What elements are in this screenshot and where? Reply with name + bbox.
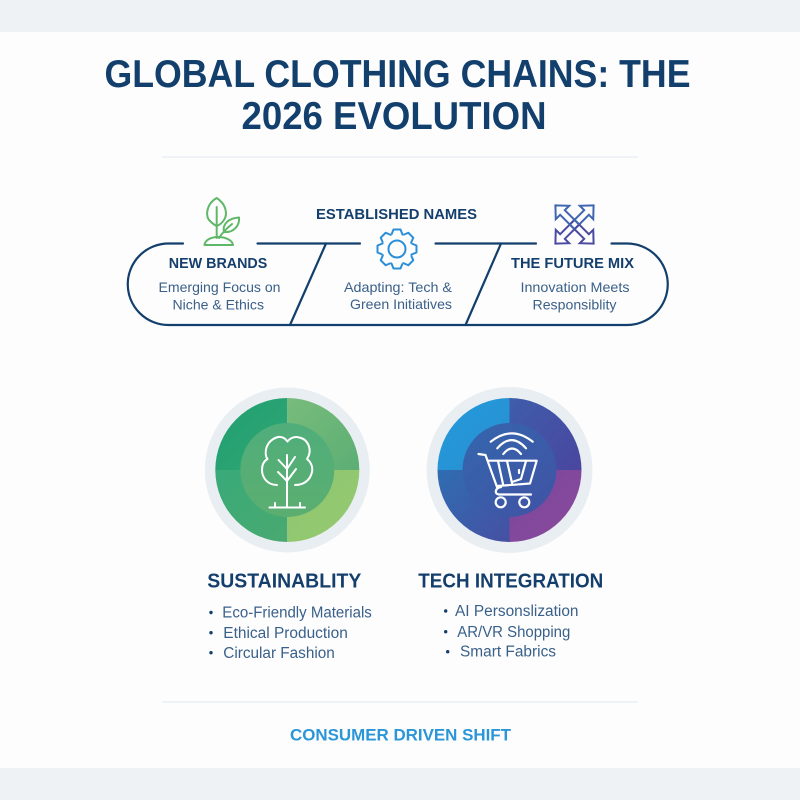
title (104, 53, 690, 138)
description: Green Initiatives (350, 296, 452, 312)
segment: established names (316, 207, 477, 312)
top band (0, 0, 800, 32)
description (158, 279, 280, 312)
description: Emerging Focus on (158, 279, 280, 295)
segment: the future mix (511, 199, 634, 312)
heading: NEW BRANDS (169, 256, 268, 272)
description (520, 279, 630, 312)
bullet list (444, 603, 578, 660)
heading: ESTABLISHED NAMES (316, 207, 477, 223)
segment: new brands (158, 198, 280, 312)
bullet list: Ethical Production (223, 625, 348, 642)
heading: TECH INTEGRATION (418, 570, 603, 592)
panel: three-part evolution pill (128, 198, 668, 325)
bullet list: Smart Fabrics (460, 644, 556, 660)
description (344, 279, 453, 312)
icon: sprout (204, 198, 239, 245)
icon: green quadrant circle with tree (205, 388, 370, 552)
icon: gear (378, 230, 416, 268)
icon: blue quadrant circle with cart (426, 387, 592, 553)
title: GLOBAL CLOTHING CHAINS: THE (104, 53, 690, 96)
icon: wifi shopping cart (478, 433, 537, 507)
footer caption: CONSUMER DRIVEN SHIFT (290, 726, 512, 744)
pill outline (128, 244, 668, 325)
bullet list: Eco-Friendly Materials (222, 604, 372, 622)
icon: tree (262, 437, 312, 508)
bullet list (209, 604, 372, 662)
bullet list: Circular Fashion (223, 645, 335, 662)
description: Responsiblity (532, 296, 616, 312)
bullet list: AR/VR Shopping (457, 624, 570, 641)
description: Niche & Ethics (172, 296, 264, 312)
heading: SUSTAINABLITY (207, 570, 362, 592)
panel: sustainability (205, 388, 372, 662)
description: Innovation Meets (520, 279, 630, 295)
icon: expanding arrows (549, 199, 600, 250)
bottom band (0, 768, 800, 800)
bullet list: AI Personslization (455, 603, 578, 620)
panel: tech integration (418, 387, 603, 660)
heading: THE FUTURE MIX (511, 256, 634, 272)
description: Adapting: Tech & (344, 279, 453, 295)
title: 2026 EVOLUTION (242, 95, 546, 138)
